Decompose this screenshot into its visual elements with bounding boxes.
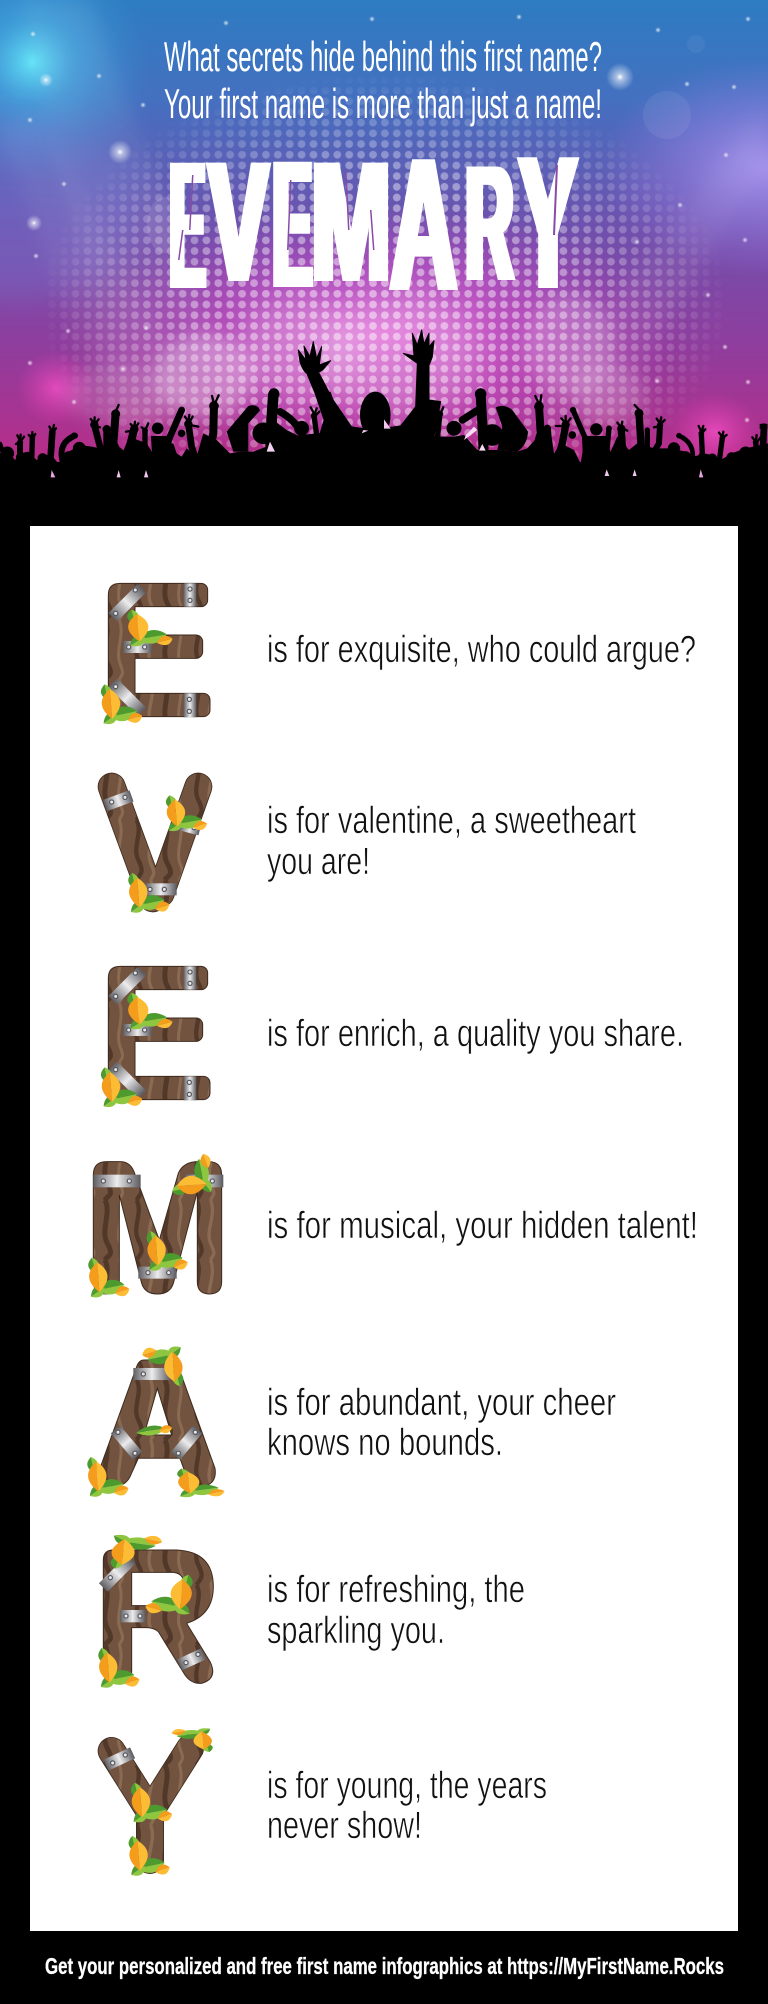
text lines R: is for refreshing, the bbox=[267, 1569, 525, 1611]
title name EVEMARY: V bbox=[208, 126, 268, 318]
icon: wooden letter V bbox=[103, 787, 209, 916]
icon: wooden letter R bbox=[97, 1532, 213, 1691]
title name EVEMARY: E bbox=[170, 123, 205, 327]
crowd left half bbox=[0, 342, 391, 490]
small raised hands bbox=[436, 395, 761, 442]
title name EVEMARY: M bbox=[311, 126, 391, 318]
text lines R: sparkling you. bbox=[267, 1610, 445, 1652]
row 1: letter E bbox=[99, 583, 696, 728]
icon: wooden letter E bbox=[99, 583, 210, 728]
text lines R bbox=[267, 1569, 525, 1652]
title name EVEMARY bbox=[170, 117, 578, 331]
title name EVEMARY: R bbox=[466, 131, 514, 315]
row 2: letter V bbox=[103, 787, 636, 916]
title name EVEMARY: A bbox=[390, 119, 457, 331]
header concert background bbox=[0, 0, 768, 490]
text lines V: is for valentine, a sweetheart bbox=[267, 800, 636, 842]
text lines V: you are! bbox=[267, 841, 370, 883]
text: Y bbox=[518, 117, 578, 329]
row 5: letter A bbox=[86, 1343, 616, 1500]
icon: wooden letter M bbox=[87, 1152, 223, 1301]
main right hand and arm bbox=[382, 330, 441, 467]
icon: wooden letter Y bbox=[104, 1726, 214, 1879]
crowd silhouette bbox=[0, 330, 768, 532]
subtitle lines bbox=[164, 33, 602, 127]
row 7: letter Y bbox=[104, 1726, 547, 1879]
row 6: letter R bbox=[97, 1532, 525, 1691]
sparkle stars bbox=[26, 14, 751, 423]
crowd right half bbox=[382, 330, 768, 490]
text lines Y: is for young, the years bbox=[267, 1765, 547, 1807]
text lines Y: never show! bbox=[267, 1805, 422, 1847]
text lines Y bbox=[267, 1765, 547, 1847]
text lines V bbox=[267, 800, 636, 883]
small raised hands bbox=[16, 395, 319, 444]
icon: wooden letter E bbox=[99, 966, 210, 1111]
main left hand and arm bbox=[298, 342, 331, 377]
text lines A: is for abundant, your cheer bbox=[267, 1382, 616, 1424]
text lines A bbox=[267, 1382, 616, 1464]
row 4: letter M bbox=[87, 1152, 698, 1301]
row 3: letter E bbox=[99, 966, 684, 1111]
text lines A: knows no bounds. bbox=[267, 1422, 503, 1464]
dot matrix lights bbox=[54, 82, 710, 458]
icon: wooden letter A bbox=[86, 1343, 226, 1500]
white content panel bbox=[30, 526, 738, 1931]
title name EVEMARY: E bbox=[273, 122, 312, 326]
